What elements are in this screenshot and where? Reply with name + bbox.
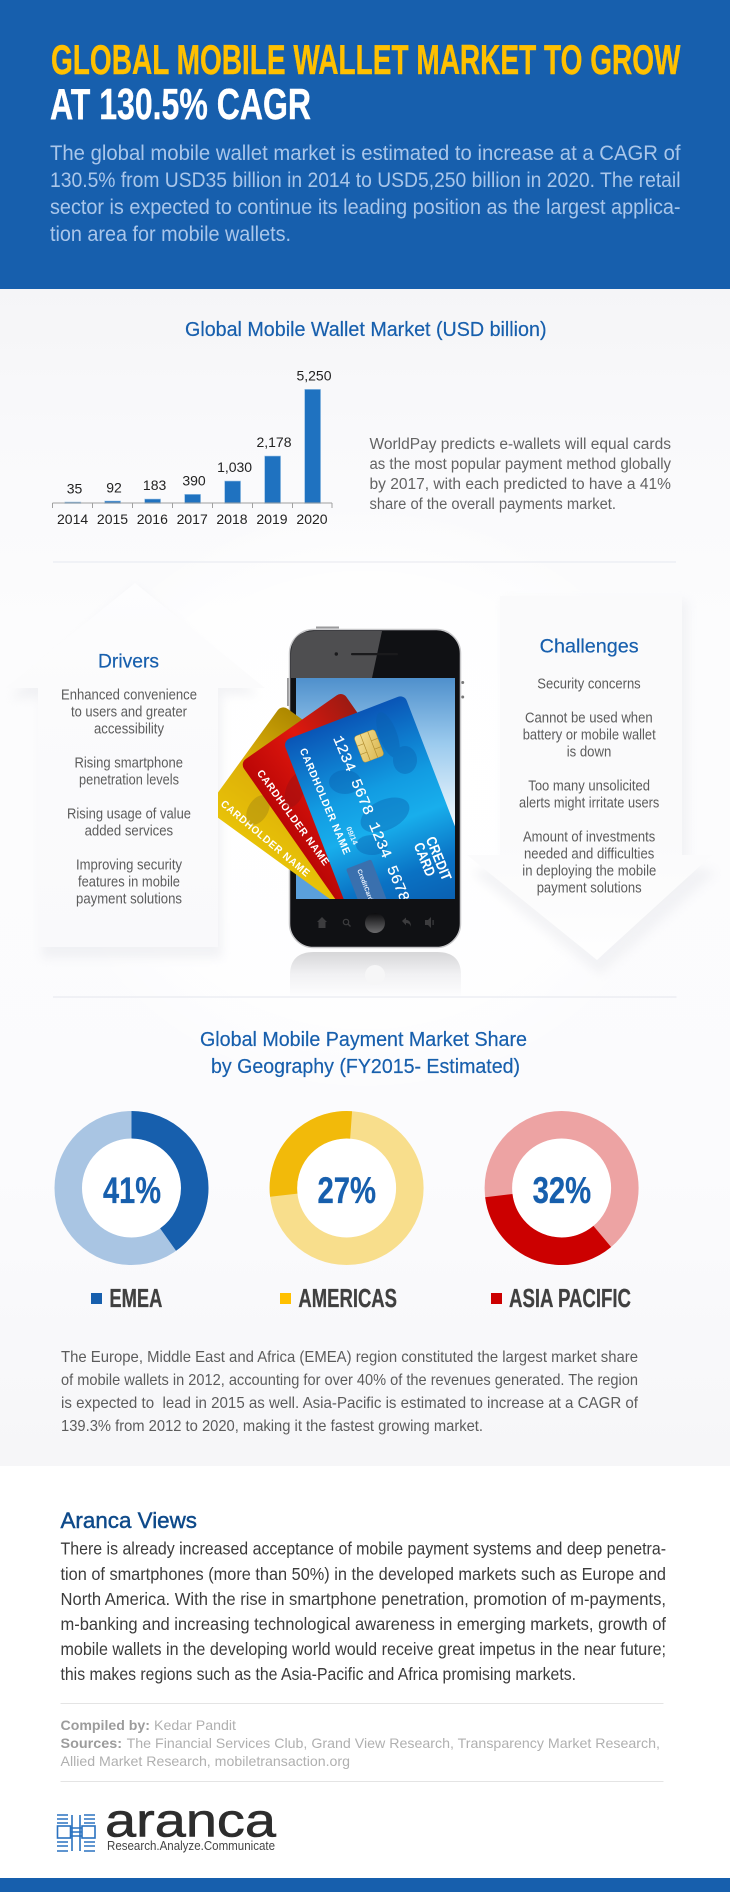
legend: EMEA [91,1285,162,1313]
panel: challenges text: is down [567,744,611,760]
credit card brand: CREDIT [422,835,454,883]
panel: challenges text: Amount of investments [523,829,655,845]
donut: Americas 27%: 27% [318,1170,376,1211]
intro paragraph: sector is expected to continue its leading position as the largest applica- [50,196,680,219]
credit cards [218,694,455,899]
intro paragraph: 130.5% from USD35 billion in 2014 to USD5,250 billion in 2020. The retail [50,169,680,192]
bar chart: 35 [67,481,82,497]
panel: drivers text: features in mobile [78,874,180,890]
logo tagline: Research.Analyze.Communicate [107,1838,275,1853]
red card [242,694,358,899]
card stripe logo [346,860,386,899]
section heading: Global Mobile Payment Market Share [200,1028,527,1051]
title line 2: AT 130.5% CAGR [50,80,311,129]
geography paragraph [61,1349,639,1435]
WorldPay text block: as the most popular payment method globally [370,456,671,473]
logo icon [57,1815,95,1851]
panel: drivers text: added services [85,823,173,839]
panel: challenges text: Cannot be used when [525,710,653,726]
panel: drivers text: Enhanced convenience [61,687,197,703]
donut: Asia Pacific 32% [472,1099,651,1277]
bar chart [52,368,332,527]
Aranca Views body: tion of smartphones (more than 50%) in the developed markets such as Europe and [60,1564,666,1584]
intro paragraph: The global mobile wallet market is estimated to increase at a CAGR of [50,142,681,165]
panel: challenges text: Too many unsolicited [528,778,650,794]
challenges heading: Challenges [540,636,639,658]
geography paragraph: is expected to lead in 2015 as well. Asia-Pacific is estimated to increase at a CAGR of [61,1395,639,1412]
panel: challenges text: needed and difficulties [524,846,654,862]
icon: drivers up arrow [5,583,265,958]
legend: Americas: AMERICAS [298,1285,397,1313]
credits and sources: Sources: [60,1735,122,1751]
panel: challenges text: battery or mobile wallet [523,727,656,743]
panel: drivers text: Rising smartphone [74,755,183,771]
phone reflection [290,952,461,996]
panel: drivers text: payment solutions [76,891,182,907]
drivers heading: Drivers [98,651,159,673]
panel: drivers text: accessibility [94,721,165,737]
bar chart: 1,030 [217,459,252,475]
Aranca Views body [60,1539,666,1684]
geography paragraph: of mobile wallets in 2012, accounting for over 40% of the revenues generated. The region [61,1372,638,1389]
phone screen [296,678,455,899]
WorldPay text block: share of the overall payments market. [370,496,616,513]
icon: challenges down arrow [467,596,716,975]
yellow card [218,707,336,899]
expiry: 09/14 [344,825,360,847]
bar chart: 5,250 [296,368,332,384]
panel: drivers text [61,651,197,907]
credits and sources: The Financial Services Club, Grand View Research, Transparency Market Research, [127,1735,660,1751]
Aranca Views body: this makes regions such as the Asia-Pacific and Africa promising markets. [60,1664,576,1684]
intro paragraph: tion area for mobile wallets. [50,223,291,246]
card number: 1234 5678 1234 5678 [328,733,412,904]
panel: challenges text: payment solutions [537,880,642,896]
donut: EMEA 41% [68,1125,195,1251]
Aranca Views heading: Aranca Views [60,1508,197,1533]
donut: EMEA 41%: 41% [103,1170,161,1211]
panel: drivers text: penetration levels [79,772,179,788]
chart heading: Global Mobile Wallet Market (USD billion) [185,318,546,341]
card stripe logo: CreditCard [355,868,374,902]
intro paragraph [50,142,681,246]
WorldPay text block: WorldPay predicts e-wallets will equal cards [370,436,671,453]
blue card: CARD [410,841,438,879]
panel: Aranca Views [0,1466,730,1878]
card chip [354,729,384,763]
legend: Americas [280,1285,397,1313]
panel: header [0,0,730,289]
legend: Asia Pacific [491,1285,631,1313]
section heading: by Geography (FY2015- Estimated) [211,1055,520,1078]
bar chart: 2017 [177,511,208,527]
WorldPay text block [370,436,671,513]
Aranca Views body: mobile wallets in the developing world would receive great impetus in the near future; [60,1639,666,1659]
blue card [285,696,455,899]
camera and speaker [335,652,398,656]
geography paragraph: 139.3% from 2012 to 2020, making it the fastest growing market. [61,1418,483,1435]
bar chart: 92 [106,480,122,496]
logo: aranca [57,1794,277,1853]
panel: challenges text [519,636,659,896]
cardholder name: CARDHOLDER NAME [297,746,353,857]
panel: challenges text: alerts might irritate users [519,795,659,811]
Aranca Views body: m-banking and increasing technological awareness in emerging markets, growth of [60,1614,666,1634]
panel: drivers text: Rising usage of value [67,806,191,822]
red card: CARDHOLDER NAME [254,768,332,869]
phone control icons [317,913,434,933]
icon: smartphone with credit cards [218,626,464,948]
phone body [290,630,460,948]
phone side buttons [287,626,464,706]
panel: challenges text: Security concerns [537,676,641,692]
bar chart: 2,178 [256,434,292,450]
credits and sources: Kedar Pandit [154,1717,236,1733]
legend: EMEA: EMEA [109,1285,162,1313]
bar chart: 2018 [216,511,248,527]
panel: market share by geography [61,1028,651,1435]
panel: drivers text: to users and greater [71,704,187,720]
section heading [200,1028,527,1078]
yellow card: CARDHOLDER NAME [218,798,312,880]
bar chart: 2016 [137,511,168,527]
panel: drivers text: Improving security [76,857,183,873]
donut: Americas 27% [277,1118,417,1258]
panel: challenges text: in deploying the mobile [522,863,656,879]
legend: Asia Pacific: ASIA PACIFIC [509,1285,631,1313]
bar chart: 390 [182,473,206,489]
Aranca Views body: North America. With the rise in smartphone penetration, promotion of m-payments, [60,1589,666,1609]
panel: market size chart section [52,318,671,527]
card map [329,709,417,855]
bar chart: 183 [143,477,166,493]
footer bar [0,1878,730,1892]
credits and sources [60,1717,660,1769]
bar chart: 2020 [296,511,328,527]
bar chart: 2015 [97,511,128,527]
bar chart: 2014 [57,511,88,527]
Aranca Views body: There is already increased acceptance of mobile payment systems and deep penetra- [60,1539,666,1559]
WorldPay text block: by 2017, with each predicted to have a 41% [370,476,671,493]
credits and sources: Allied Market Research, mobiletransaction.org [60,1753,350,1769]
bar chart: 2019 [256,511,288,527]
donut: Asia Pacific 32%: 32% [533,1170,591,1211]
logo wordmark: aranca [105,1794,277,1846]
geography paragraph: The Europe, Middle East and Africa (EMEA) region constituted the largest market share [61,1349,638,1366]
credits and sources: Compiled by: [60,1717,150,1733]
panel: main background [0,289,730,1466]
